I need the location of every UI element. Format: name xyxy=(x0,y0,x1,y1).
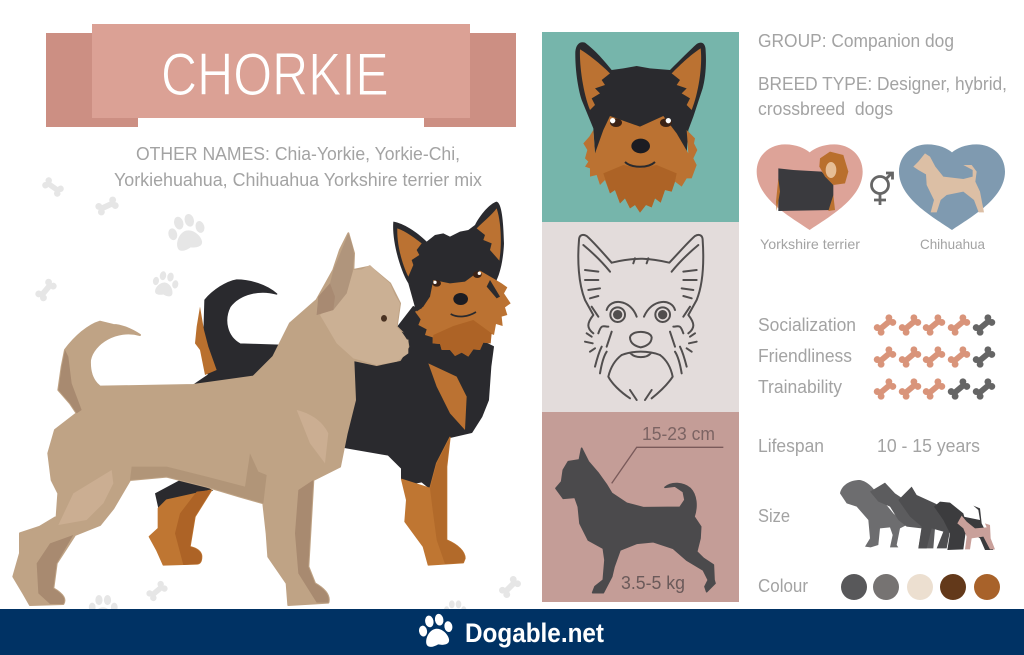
yorkshire terrier label: Yorkshire terrier xyxy=(760,236,860,252)
friendliness label: Friendliness xyxy=(758,346,852,366)
background paws and bones xyxy=(34,176,522,622)
right ribbon xyxy=(424,33,516,127)
icon: footer paw xyxy=(417,612,455,649)
title: CHORKIE xyxy=(161,41,389,108)
icon: outline dog head xyxy=(578,235,703,400)
other names text: OTHER NAMES: Chia-Yorkie, Yorkie-Chi, xyxy=(136,144,460,164)
panel: yorkie face on teal xyxy=(542,32,739,222)
group text: GROUP: Companion dog xyxy=(758,31,954,51)
colour swatches xyxy=(841,574,1000,600)
icon: colored dog head xyxy=(575,42,706,213)
panel: size and weight silhouette xyxy=(542,412,739,602)
trainability rating bones xyxy=(872,377,997,401)
breed type text: BREED TYPE: Designer, hybrid, xyxy=(758,74,1007,94)
weight label: 3.5-5 kg xyxy=(621,573,685,593)
other names text xyxy=(114,144,482,190)
height label: 15-23 cm xyxy=(642,424,715,444)
yorkie full body illustration xyxy=(149,202,511,565)
breed type text: crossbreed dogs xyxy=(758,99,893,119)
breed type text xyxy=(758,74,1007,119)
icon: dog silhouette xyxy=(556,447,723,593)
socialization label: Socialization xyxy=(758,315,856,335)
size label: Size xyxy=(758,506,790,526)
socialization rating bones xyxy=(872,313,997,337)
lifespan label: Lifespan xyxy=(758,436,824,456)
front banner xyxy=(92,24,470,118)
size comparison silhouettes xyxy=(840,480,995,550)
parent breed: chihuahua heart xyxy=(899,144,1005,230)
colour label: Colour xyxy=(758,576,808,596)
icon: male and female symbol xyxy=(872,173,892,205)
panel: yorkie face outline xyxy=(542,222,739,412)
parent breed: yorkshire terrier heart xyxy=(757,144,863,230)
friendliness rating bones xyxy=(872,345,997,369)
chihuahua mix full body illustration xyxy=(13,233,410,605)
trainability label: Trainability xyxy=(758,377,842,397)
chihuahua label: Chihuahua xyxy=(920,236,985,252)
left ribbon xyxy=(46,33,138,127)
banner xyxy=(46,24,516,127)
footer bar xyxy=(0,609,1024,655)
footer brand text: Dogable.net xyxy=(465,618,604,648)
height pointer line xyxy=(612,447,723,483)
other names text: Yorkiehuahua, Chihuahua Yorkshire terrier mix xyxy=(114,170,482,190)
lifespan value: 10 - 15 years xyxy=(877,436,980,456)
